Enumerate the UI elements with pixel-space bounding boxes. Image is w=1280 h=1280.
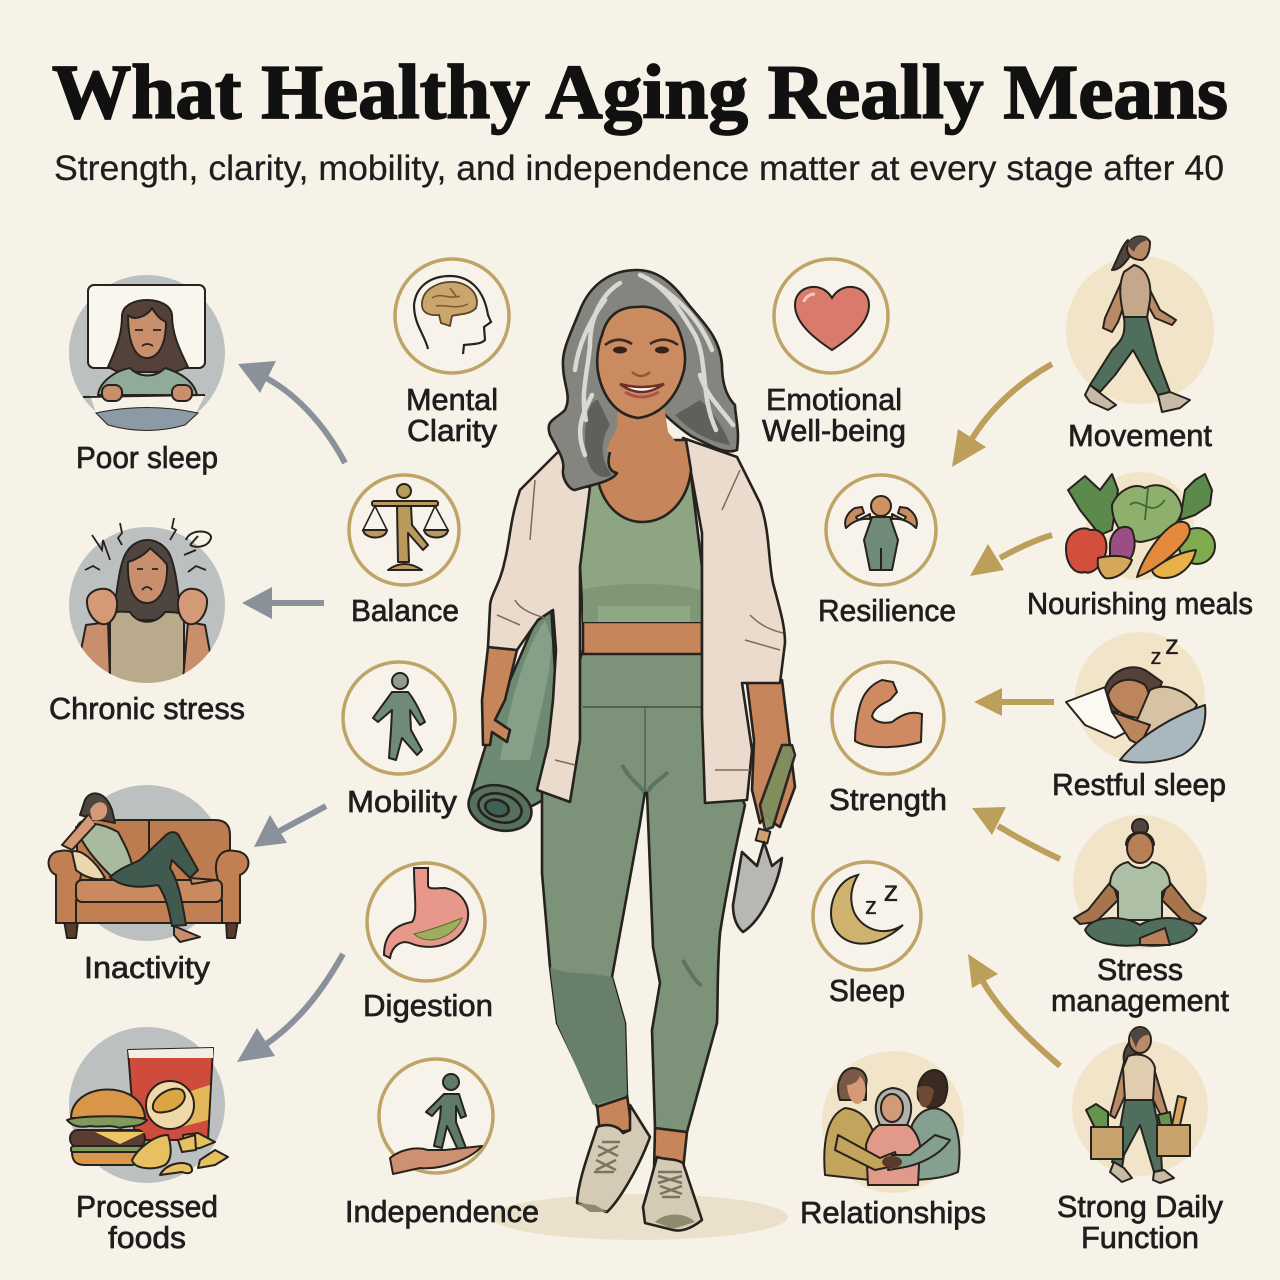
label: Movement bbox=[1068, 418, 1212, 453]
icon: stressed person with clenched fists bbox=[69, 518, 225, 690]
label: Stress bbox=[1097, 952, 1183, 987]
Right item: Strong Daily Function bbox=[1057, 1027, 1223, 1255]
icon: sleeping person with z's: z bbox=[1150, 644, 1162, 669]
gold arrow: strong daily function to sleep bbox=[968, 954, 1060, 1066]
gold arrow: nourishing meals to resilience bbox=[970, 535, 1052, 576]
label: Mobility bbox=[347, 784, 458, 819]
label bbox=[406, 382, 498, 448]
icon: crescent moon: z bbox=[865, 893, 877, 920]
icon: crescent moon bbox=[813, 862, 921, 970]
label: Function bbox=[1081, 1220, 1199, 1255]
Inner left: Mobility bbox=[343, 662, 458, 819]
grey arrow: digestion to processed foods bbox=[237, 954, 343, 1062]
icon: meditating woman bbox=[1073, 815, 1207, 949]
label: Resilience bbox=[818, 593, 956, 628]
icon: walker on open hand bbox=[379, 1059, 493, 1174]
ground shadow bbox=[492, 1194, 788, 1240]
label bbox=[76, 1189, 218, 1255]
icon: stomach bbox=[367, 863, 485, 981]
label: Relationships bbox=[800, 1195, 986, 1230]
icon: figure as balance scale bbox=[349, 475, 459, 585]
left forearm bbox=[482, 647, 517, 745]
Inner right: Strength bbox=[829, 662, 947, 817]
Right item: Nourishing meals bbox=[1027, 472, 1253, 621]
title: What Healthy Aging Really Means bbox=[52, 49, 1228, 135]
Inner left: Independence bbox=[345, 1059, 539, 1229]
icon: person lying awake on pillow bbox=[69, 275, 225, 431]
label: Strong Daily bbox=[1057, 1189, 1223, 1224]
cardigan right panel bbox=[683, 438, 785, 803]
gold arrow: movement to emotional well-being bbox=[952, 364, 1052, 467]
icon: heart bbox=[774, 259, 888, 373]
midriff bbox=[583, 620, 702, 654]
Inner left: Mental Clarity bbox=[395, 259, 509, 448]
label: Emotional bbox=[766, 382, 902, 417]
leggings bbox=[542, 650, 745, 1132]
Inner right: Sleep bbox=[813, 862, 921, 1008]
label: Mental bbox=[406, 382, 498, 417]
label bbox=[1051, 952, 1229, 1018]
icon: flexing figure bbox=[826, 475, 936, 585]
label: Inactivity bbox=[84, 950, 211, 985]
right shoe bbox=[643, 1157, 702, 1231]
hair bbox=[549, 270, 738, 490]
chest bbox=[597, 440, 691, 522]
Left item: Chronic stress bbox=[49, 518, 245, 726]
Right item: Restful sleep bbox=[1052, 629, 1226, 802]
grey arrow: balance to poor sleep bbox=[238, 361, 345, 463]
icon: walking woman bbox=[1066, 236, 1214, 412]
icon: sleeping person with z's bbox=[1066, 629, 1205, 762]
yoga mat bbox=[463, 587, 562, 838]
label bbox=[762, 382, 906, 448]
central figure: woman with yoga mat and trowel bbox=[463, 270, 795, 1240]
icon: sleeping person with z's: z bbox=[1165, 629, 1179, 660]
gold arrow: restful sleep to strength bbox=[974, 688, 1054, 716]
grey arrow: mobility to inactivity bbox=[254, 806, 326, 847]
icon: three people embracing bbox=[822, 1051, 964, 1193]
label bbox=[1057, 1189, 1223, 1255]
icon: burger and chips bbox=[67, 1027, 228, 1183]
sports top bbox=[580, 467, 702, 622]
Left item: Poor sleep bbox=[69, 275, 225, 475]
Inner right: Emotional Well-being bbox=[762, 259, 906, 448]
icon: flexed arm bbox=[832, 662, 944, 774]
icon: woman carrying grocery bags bbox=[1072, 1027, 1208, 1183]
neck bbox=[606, 405, 684, 452]
label: Clarity bbox=[407, 413, 498, 448]
Inner left: Digestion bbox=[363, 863, 493, 1023]
label: Nourishing meals bbox=[1027, 586, 1253, 621]
icon: brain in head profile bbox=[395, 259, 509, 373]
icon: person slouched on sofa bbox=[49, 785, 248, 942]
Left item: Inactivity bbox=[49, 785, 248, 985]
subtitle: Strength, clarity, mobility, and independence matter at every stage after 40 bbox=[54, 149, 1224, 188]
label: Restful sleep bbox=[1052, 767, 1226, 802]
label: Balance bbox=[351, 593, 459, 628]
gold arrow: stress management to strength bbox=[972, 807, 1060, 859]
icon: vegetables bbox=[1066, 472, 1215, 580]
label: Sleep bbox=[829, 973, 905, 1008]
Right item: Stress management bbox=[1051, 815, 1229, 1018]
left shoe bbox=[577, 1105, 650, 1212]
grey arrow: balance to chronic stress bbox=[242, 587, 324, 619]
label: Chronic stress bbox=[49, 691, 245, 726]
Inner left: Balance bbox=[349, 475, 459, 628]
label: management bbox=[1051, 983, 1229, 1018]
label: Digestion bbox=[363, 988, 493, 1023]
Inner right: Resilience bbox=[818, 475, 956, 628]
trowel bbox=[733, 745, 795, 932]
label: Well-being bbox=[762, 413, 906, 448]
face bbox=[597, 307, 685, 418]
Inner right: Relationships bbox=[800, 1051, 986, 1230]
right forearm and hand bbox=[747, 680, 795, 827]
Right item: Movement bbox=[1066, 236, 1214, 453]
ankles bbox=[597, 1095, 687, 1170]
cardigan left panel bbox=[488, 450, 590, 802]
Left item: Processed foods bbox=[67, 1027, 228, 1255]
label: Poor sleep bbox=[76, 440, 218, 475]
label: foods bbox=[108, 1220, 186, 1255]
label: Strength bbox=[829, 782, 947, 817]
icon: walking figure bbox=[343, 662, 455, 774]
label: Independence bbox=[345, 1194, 539, 1229]
icon: crescent moon: z bbox=[884, 875, 898, 908]
label: Processed bbox=[76, 1189, 218, 1224]
